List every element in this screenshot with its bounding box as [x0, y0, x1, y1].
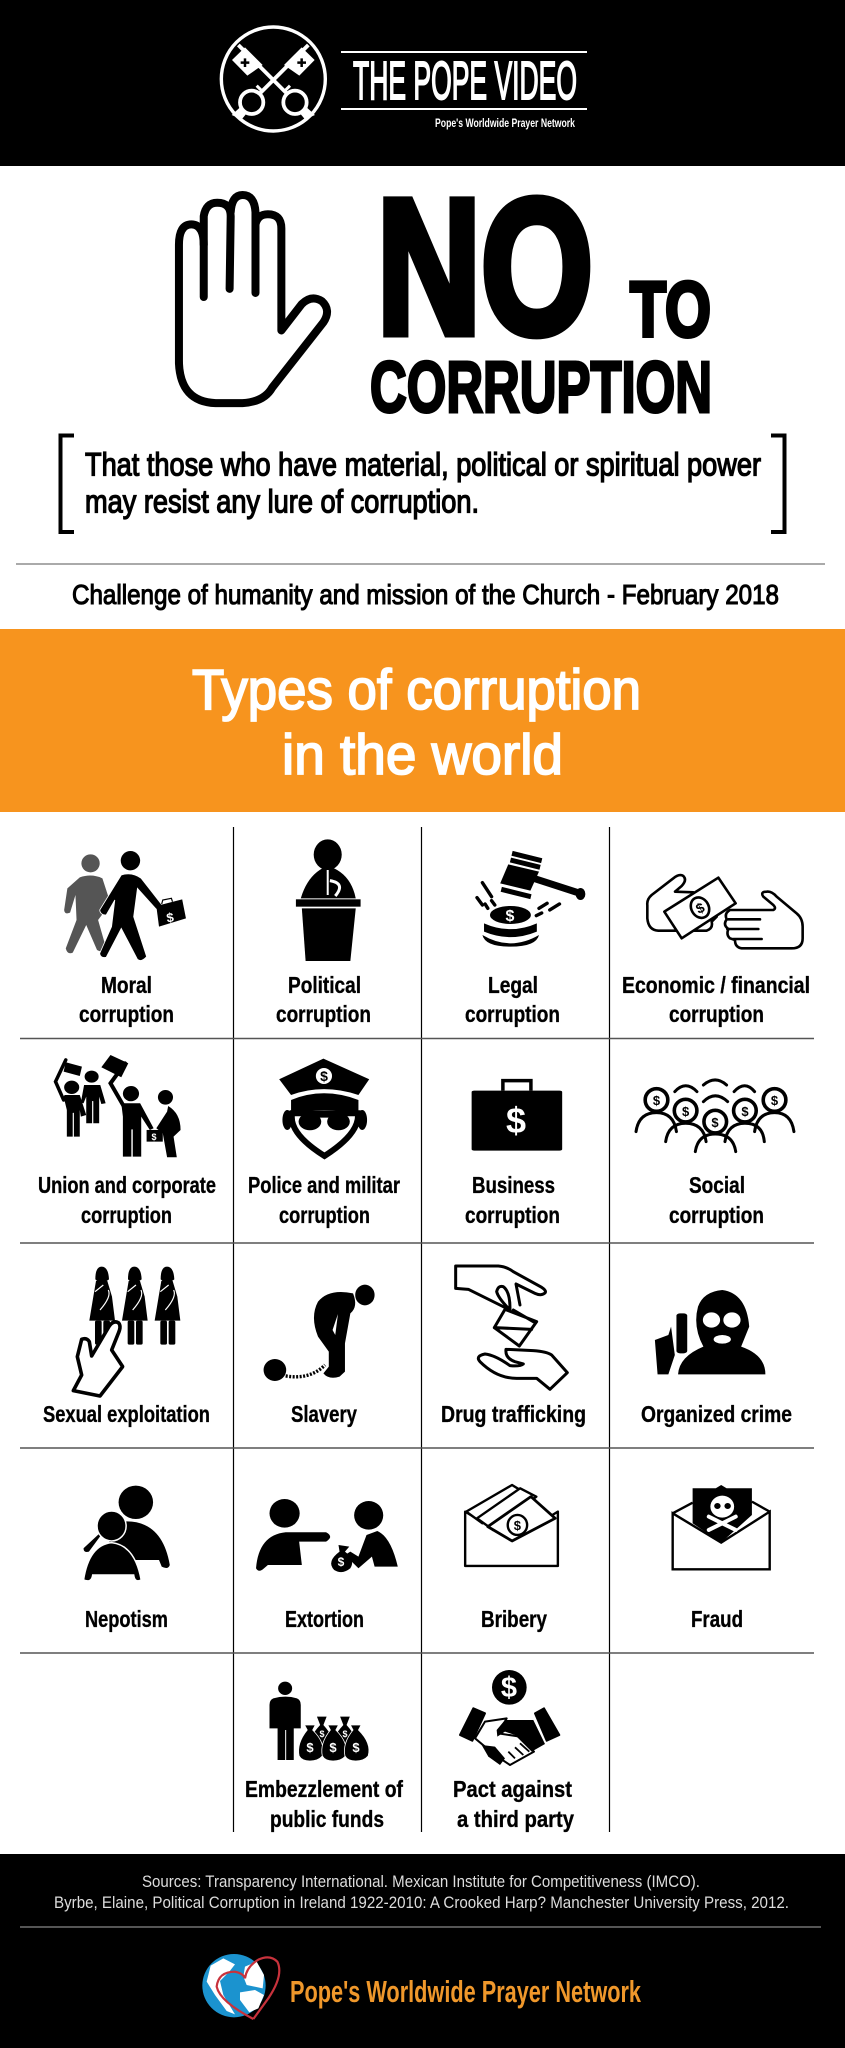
label: Moral — [101, 972, 152, 998]
icon: man with money bags: $ — [329, 1740, 337, 1755]
icon: protesters with flags and handover: $ — [151, 1132, 157, 1142]
icon: crowd with dollar heads: $ — [682, 1104, 690, 1119]
panel: business corruption — [465, 1081, 562, 1228]
panel: political corruption — [276, 839, 371, 1027]
label: Economic / financial — [622, 972, 810, 998]
label: Union and corporate — [38, 1172, 216, 1198]
icon: adult embracing child — [84, 1486, 170, 1581]
panel: social corruption — [636, 1080, 794, 1228]
icon: man with money bags: $ — [306, 1740, 314, 1755]
banner heading: Types of corruption — [192, 658, 641, 722]
icon: crowd with dollar heads: $ — [741, 1104, 749, 1119]
icon: crowd with dollar heads: $ — [653, 1093, 661, 1108]
label: Political — [288, 972, 361, 998]
icon: crowd with dollar heads — [636, 1080, 794, 1152]
icon: bent figure with ball and chain — [264, 1285, 375, 1381]
icon: hands passing a drug packet — [456, 1266, 567, 1389]
icon: envelope with skull letter — [673, 1485, 770, 1569]
title word TO: TO — [630, 265, 711, 353]
panel: pact against a third party — [453, 1670, 574, 1832]
sources: Sources: Transparency International. Mexican Institute for Competitiveness (IMCO). — [142, 1872, 700, 1891]
icon: policeman with sunglasses: $ — [320, 1068, 328, 1084]
header band: THE POPE VIDEO — [353, 51, 577, 111]
icon: two walking figures with briefcase: $ — [165, 909, 175, 925]
panel: moral corruption — [64, 851, 186, 1027]
icon: masked criminal with gun — [655, 1290, 765, 1374]
icon: man with money bags: $ — [342, 1729, 348, 1739]
left bracket — [60, 436, 74, 532]
logo tagline: Pope's Worldwide Prayer Network — [435, 116, 575, 130]
icon: black briefcase: $ — [506, 1100, 526, 1141]
right bracket — [771, 436, 784, 532]
logo rule bottom — [341, 108, 587, 110]
icon: two walking figures with briefcase — [64, 851, 186, 961]
icon: black briefcase — [472, 1081, 562, 1151]
icon: three women and pointing hand — [73, 1267, 180, 1396]
prayer intention in brackets — [60, 436, 784, 532]
panel: police and militar corruption — [248, 1059, 400, 1228]
icon: crowd with dollar heads: $ — [771, 1093, 779, 1108]
icon: gavel on coin: $ — [506, 908, 515, 925]
icon: speaker at podium — [296, 839, 361, 961]
label: corruption — [465, 1001, 560, 1027]
orange banner — [0, 629, 845, 812]
label: Social — [689, 1172, 745, 1198]
icon: raised hand — [179, 195, 327, 403]
label: corruption — [279, 1202, 370, 1228]
label: corruption — [276, 1001, 371, 1027]
title word NO: NO — [377, 159, 593, 374]
icon: hands passing a banknote: $ — [693, 899, 707, 917]
intention text: may resist any lure of corruption. — [85, 484, 479, 520]
logo rule top — [341, 51, 587, 53]
panel: sexual exploitation — [43, 1267, 210, 1427]
label: Nepotism — [85, 1606, 168, 1632]
panel: nepotism — [84, 1486, 170, 1632]
icon: envelope with banknotes — [465, 1485, 558, 1566]
icon: handshake under dollar coin: $ — [501, 1672, 517, 1704]
label: a third party — [457, 1806, 574, 1832]
icon: protesters with flags and handover — [56, 1055, 181, 1157]
icon: two figures exchanging money bag — [256, 1499, 398, 1572]
panel: union and corporate corruption — [38, 1055, 216, 1228]
panel: organized crime — [641, 1290, 792, 1427]
icon: crowd with dollar heads: $ — [711, 1115, 719, 1130]
panel: drug trafficking — [441, 1266, 586, 1427]
label: Embezzlement of — [245, 1776, 403, 1802]
label: Sexual exploitation — [43, 1401, 210, 1427]
logo: crossed keys — [221, 27, 325, 131]
label: Legal — [488, 972, 538, 998]
label: corruption — [669, 1001, 764, 1027]
label: public funds — [270, 1806, 384, 1832]
label: Bribery — [481, 1606, 547, 1632]
icon: two figures exchanging money bag: $ — [338, 1555, 345, 1569]
label: Drug trafficking — [441, 1401, 586, 1427]
label: Extortion — [285, 1606, 364, 1632]
panel: bribery — [465, 1485, 558, 1632]
label: corruption — [669, 1202, 764, 1228]
network logo: globe with heart — [202, 1954, 279, 2019]
title word CORRUPTION: CORRUPTION — [370, 348, 712, 428]
label: Fraud — [691, 1606, 743, 1632]
panel: extortion — [256, 1499, 398, 1632]
label: corruption — [79, 1001, 174, 1027]
title: NO TO CORRUPTION — [370, 159, 712, 428]
icon: handshake under dollar coin — [460, 1670, 559, 1765]
header band — [0, 0, 845, 166]
icon: man with money bags: $ — [352, 1740, 360, 1755]
icon: envelope with banknotes: $ — [514, 1518, 522, 1533]
icon: hands passing a banknote — [647, 875, 803, 948]
label: Pact against — [453, 1776, 572, 1802]
icon: man with money bags — [270, 1682, 369, 1761]
label: corruption — [465, 1202, 560, 1228]
network name: Pope's Worldwide Prayer Network — [290, 1974, 642, 2009]
panel: economic / financial corruption — [622, 875, 810, 1027]
label: Organized crime — [641, 1401, 792, 1427]
banner heading: in the world — [282, 723, 563, 787]
label: Business — [472, 1172, 555, 1198]
panel: embezzlement of public funds — [245, 1682, 403, 1832]
panel: fraud — [673, 1485, 770, 1632]
label: Police and militar — [248, 1172, 400, 1198]
icon: policeman with sunglasses — [279, 1059, 369, 1156]
label: corruption — [81, 1202, 172, 1228]
panel: legal corruption — [465, 853, 585, 1027]
footer band — [0, 1854, 845, 2048]
label: Slavery — [291, 1401, 357, 1427]
panel: slavery — [264, 1285, 375, 1427]
icon: man with money bags: $ — [319, 1729, 325, 1739]
icon: gavel on coin — [477, 853, 585, 947]
